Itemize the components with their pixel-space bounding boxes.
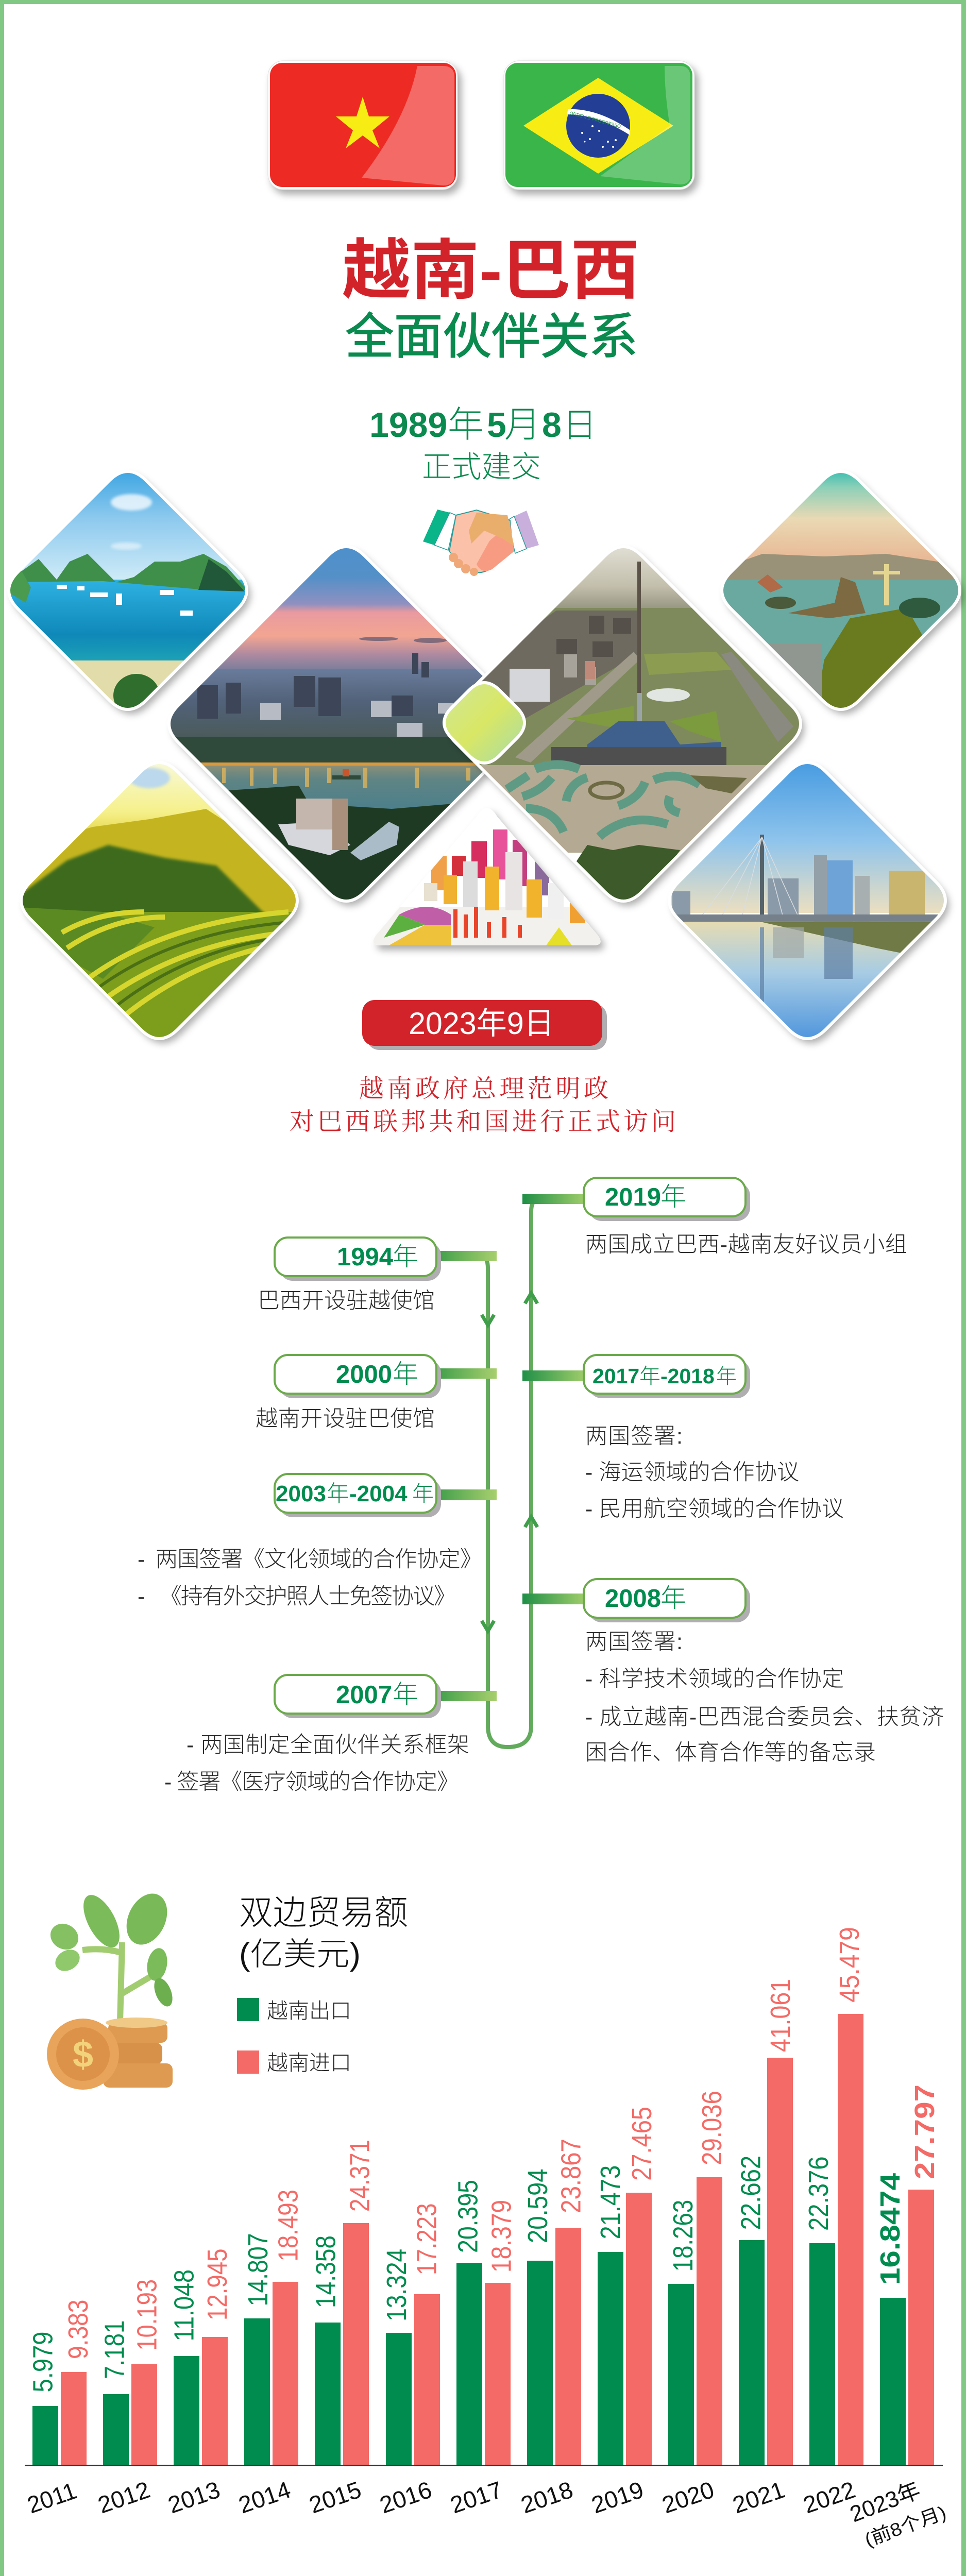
title: 越南-巴西 [342, 234, 639, 308]
export value labels: 14.358 [310, 2235, 341, 2308]
year labels: 2023年 [846, 2478, 924, 2527]
photo: Hanoi [169, 548, 490, 910]
text: 2008: 困合作、体育合作等的备忘录 [585, 1740, 876, 1765]
photo: bar chart triangle [369, 801, 606, 948]
dollar symbol: $ [73, 2034, 93, 2075]
year labels: 2018 [517, 2476, 577, 2518]
text: 2017-2018: - 民用航空领域的合作协议 [585, 1497, 844, 1521]
flag: Brazil [504, 61, 694, 190]
export value labels: 20.594 [522, 2168, 553, 2243]
date: established: 1989 [369, 405, 447, 445]
export value labels: 5.979 [28, 2332, 59, 2393]
export value labels: 18.263 [668, 2200, 699, 2272]
box: 2007: 年 [393, 1680, 418, 1709]
import value labels: 29.036 [697, 2091, 727, 2165]
text: 2000: 越南开设驻巴使馆 [256, 1406, 435, 1431]
subtitle: 全面伙伴关系 [345, 310, 638, 364]
box: 2019 [584, 1178, 750, 1221]
chart title: 双边贸易额 [239, 1893, 408, 1931]
year labels: 2021 [729, 2476, 788, 2518]
text: 2003-2004 [138, 1547, 482, 1609]
import value labels: 17.223 [412, 2203, 443, 2275]
box: 2003-2004 [275, 1474, 441, 1517]
box: 2017-2018 [584, 1355, 750, 1398]
year labels: 2020 [658, 2476, 718, 2518]
year labels: 2019 [588, 2476, 647, 2518]
icon: yellow star [336, 97, 389, 148]
text: 2007: - 两国制定全面伙伴关系框架 [187, 1733, 469, 1757]
import value labels: 23.867 [555, 2139, 586, 2213]
icon: plant and coins [46, 1887, 176, 2090]
export value labels [28, 2156, 906, 2393]
date: established: 8 [542, 405, 562, 445]
date: established: 日 [563, 406, 597, 444]
visit heading: 越南政府总理范明政 [359, 1069, 608, 1104]
visit heading: 对巴西联邦共和国进行正式访问 [290, 1101, 676, 1137]
text: 2003-2004: 两国签署《文化领域的合作协定》 [156, 1547, 482, 1572]
year labels: 2017 [447, 2476, 506, 2518]
box: 2003-2004: 年 [327, 1481, 349, 1506]
text: 2008: - 成立越南-巴西混合委员会、扶贫济 [585, 1705, 944, 1730]
export value labels: 11.048 [169, 2269, 200, 2341]
box: 2017-2018: 年 [716, 1365, 737, 1388]
pill: 2023 visit date [362, 1000, 607, 1050]
year labels: (前8个月) [862, 2502, 949, 2551]
text: 1994: 巴西开设驻越使馆 [258, 1289, 435, 1313]
connectors [436, 1194, 583, 1701]
box: 2017-2018: 2017 [592, 1364, 639, 1388]
year labels: 2013 [164, 2476, 224, 2518]
date: established: 5 [487, 405, 506, 445]
box: 2007: 2007 [336, 1681, 392, 1709]
export value labels: 16.8474 [875, 2173, 906, 2285]
box: 2007 [275, 1675, 441, 1718]
import value labels: 12.945 [202, 2248, 233, 2320]
text: formally established: 正式建交 [422, 450, 541, 484]
date: established: 月 [504, 404, 540, 445]
import value labels [63, 1927, 940, 2359]
box: 2003-2004: -2004 [349, 1481, 408, 1506]
text: 2017-2018: - 海运领域的合作协议 [585, 1460, 799, 1485]
legend: 越南进口 [267, 2051, 351, 2075]
text: 2017-2018: 两国签署: [585, 1424, 683, 1449]
export value labels: 21.473 [595, 2165, 626, 2239]
import value labels: 41.061 [765, 1979, 796, 2052]
motto: ORDEM E PROGRESSO [569, 110, 621, 129]
text: 2017-2018 [585, 1424, 844, 1521]
photo: Rio de Janeiro [711, 462, 966, 721]
year labels: 2011 [24, 2477, 80, 2518]
box: 2017-2018: 年 [639, 1364, 660, 1388]
box: 2000: 年 [393, 1360, 418, 1388]
box: 1994: 1994 [337, 1243, 393, 1271]
text: 2003-2004: - [138, 1547, 145, 1572]
text: 2008: - 科学技术领域的合作协定 [585, 1667, 844, 1691]
text: 2007 [164, 1733, 469, 1794]
box: 2008: 年 [660, 1584, 686, 1613]
year labels: 2015 [306, 2476, 365, 2518]
year labels [24, 2476, 949, 2551]
import value labels: 27.797 [909, 2084, 940, 2179]
text: 2019: 两国成立巴西-越南友好议员小组 [585, 1232, 907, 1257]
box: 2008: 2008 [605, 1585, 661, 1613]
timeline line [480, 1199, 539, 1747]
import value labels: 18.493 [273, 2190, 304, 2262]
photo: Ha Long Bay [0, 462, 258, 722]
legend: 越南出口 [267, 1999, 351, 2023]
box: 2003-2004: 2003 [276, 1481, 326, 1506]
icon: handshake [423, 510, 539, 576]
box: 2000: 2000 [336, 1361, 392, 1388]
text: 2008: 两国签署: [585, 1630, 683, 1654]
arrows on line [482, 1293, 537, 1631]
import value labels: 24.371 [344, 2140, 375, 2212]
photo: rice terraces [10, 753, 309, 1051]
box: 2017-2018: -2018 [660, 1364, 715, 1388]
chart title [239, 1893, 408, 1972]
timeline [138, 1178, 944, 1794]
year labels: 2016 [376, 2476, 435, 2518]
year labels: 2022 [800, 2476, 859, 2518]
photo: Brasilia [438, 536, 809, 912]
box: 1994 [275, 1238, 441, 1281]
date: established: 年 [448, 404, 484, 445]
visit heading [290, 1069, 676, 1137]
export value labels: 22.662 [736, 2156, 767, 2230]
export value labels: 7.181 [99, 2320, 130, 2379]
export value labels: 14.807 [243, 2233, 274, 2306]
import value labels: 9.383 [63, 2300, 94, 2359]
legend [237, 1998, 351, 2075]
import value labels: 45.479 [834, 1927, 865, 2003]
bars: Vietnam exports [32, 2240, 906, 2465]
bars: Vietnam imports [61, 2014, 934, 2465]
chart title: (亿美元) [239, 1937, 361, 1972]
box: 2019: 2019 [605, 1183, 661, 1211]
import value labels: 27.465 [626, 2107, 657, 2181]
export value labels: 20.395 [453, 2180, 484, 2253]
export value labels: 22.376 [803, 2156, 834, 2231]
photo: green center diamond [444, 683, 524, 763]
year labels: 2014 [235, 2476, 294, 2518]
bar chart [24, 1927, 949, 2551]
pill: 2023 visit date: 2023年9日 [409, 1006, 554, 1041]
axis [25, 2465, 943, 2466]
text: 2003-2004: - [138, 1584, 145, 1609]
text: 2007: - 签署《医疗领域的合作协定》 [164, 1770, 459, 1794]
box: 2008 [584, 1579, 750, 1622]
box: 2019: 年 [660, 1182, 686, 1211]
photo: Sao Paulo [659, 753, 958, 1051]
import value labels: 10.193 [132, 2279, 163, 2351]
box: 2000 [275, 1355, 441, 1398]
flag: Vietnam [268, 61, 457, 190]
text: 2008 [585, 1630, 944, 1765]
export value labels: 13.324 [381, 2249, 412, 2321]
box: 1994: 年 [393, 1242, 418, 1271]
box: 2003-2004: 年 [412, 1482, 434, 1506]
text: 2003-2004: 《持有外交护照人士免签协议》 [160, 1584, 456, 1609]
import value labels: 18.379 [486, 2200, 517, 2273]
year labels: 2012 [94, 2476, 154, 2518]
